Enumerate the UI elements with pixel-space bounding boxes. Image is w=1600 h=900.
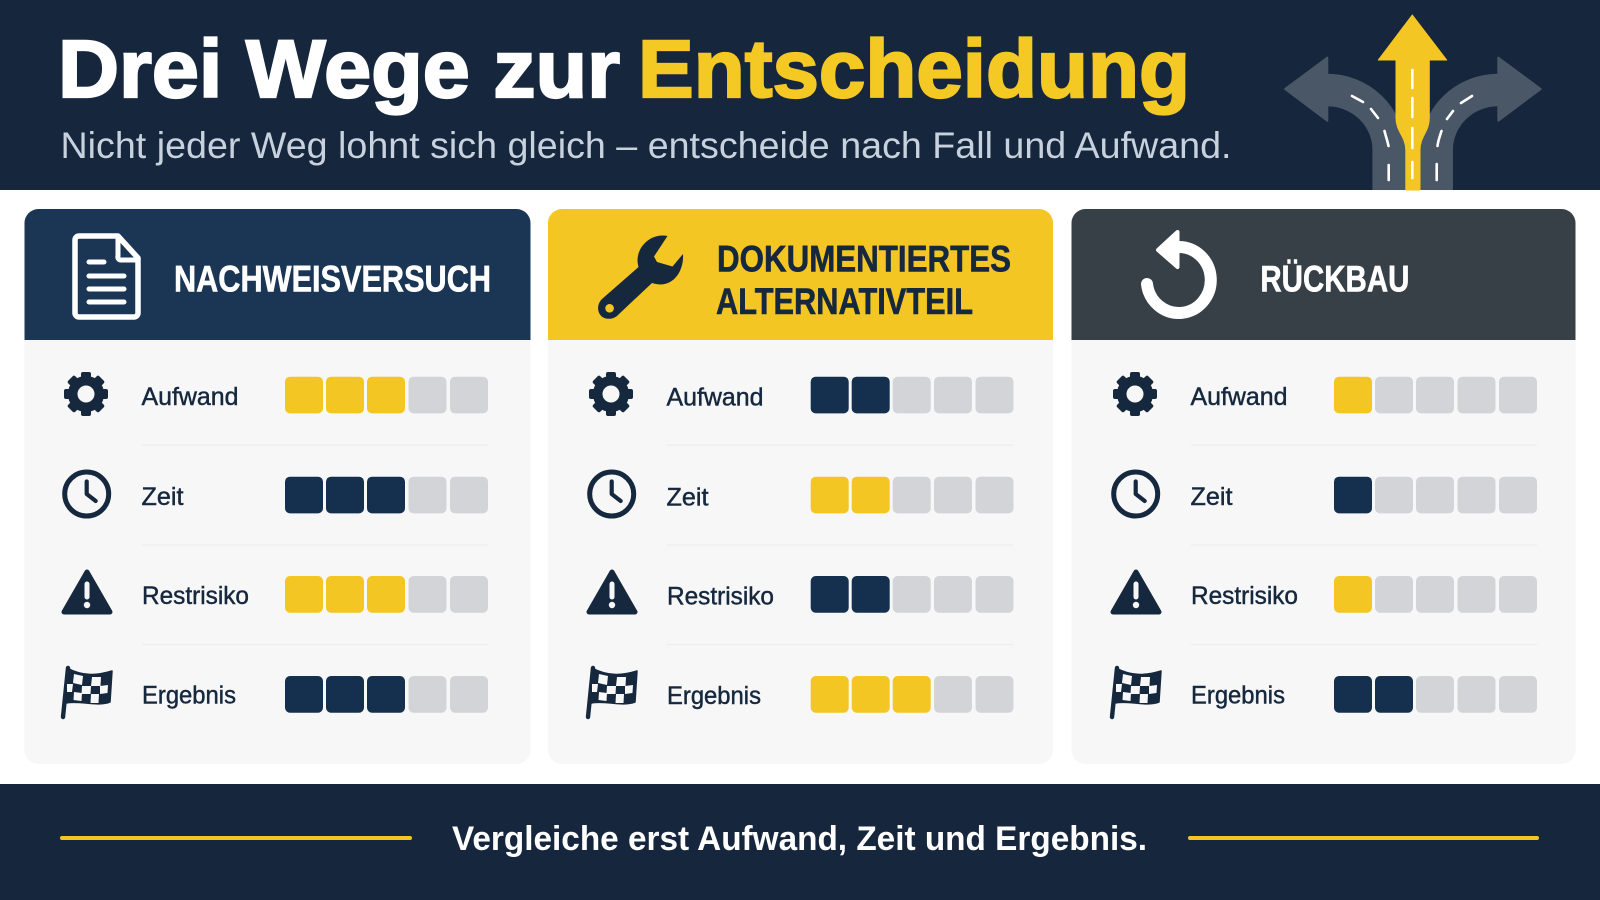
icon: gear [64,372,108,416]
rows [588,372,1014,717]
icon: undo arrow [1147,232,1211,313]
rating 2 of 5 [811,377,1014,413]
icon: checkered flag [1112,668,1161,717]
label: Restrisiko [1191,582,1298,610]
icon: warning [1113,572,1159,612]
panel: Nachweisversuch [24,209,530,764]
row: Aufwand [64,372,488,416]
icon: clock [65,472,109,516]
label: Ergebnis [142,681,236,709]
row: Ergebnis [63,668,488,717]
label: Aufwand [1190,383,1288,411]
title [58,24,1190,115]
panel header [24,209,530,340]
icon: checkered flag [63,668,112,717]
icon: gear [1113,372,1157,416]
rating 3 of 5 [285,377,488,413]
rows [1112,372,1537,717]
row: Zeit [590,472,1014,516]
panel header [1072,209,1576,340]
rating 1 of 5 [1334,576,1537,613]
icon: wrench [598,236,683,319]
label: Restrisiko [667,582,774,610]
label: Restrisiko [142,582,249,610]
icon: warning [64,572,110,612]
row: Restrisiko [589,572,1014,613]
label: Ergebnis [667,682,761,710]
rating 1 of 5 [1334,477,1537,513]
row: Aufwand [1113,372,1537,416]
row: Restrisiko [1113,572,1537,613]
rating 1 of 5 [1334,377,1537,413]
row: Restrisiko [64,572,488,613]
panel: Dokumentiertes Alternativteil [548,209,1053,764]
rows [63,372,488,717]
row: Ergebnis [588,668,1014,717]
icon: clock [1114,472,1158,516]
label: Ergebnis [1191,681,1285,709]
header band [0,0,1600,190]
icon: clock [590,472,634,516]
row: Aufwand [589,372,1014,416]
rating 3 of 5 [285,576,488,613]
icon: gear [589,372,633,416]
rating 3 of 5 [285,477,488,513]
rating 2 of 5 [811,477,1014,513]
title: Drei Wege zur [58,24,620,115]
label: Zeit [142,483,184,511]
row: Zeit [65,472,488,516]
icon: document [75,236,138,317]
row: Zeit [1114,472,1537,516]
heading: ALTERNATIVTEIL [716,281,973,322]
icon: warning [589,572,635,612]
rating 3 of 5 [811,676,1014,713]
rating 2 of 5 [1334,676,1537,713]
label: Aufwand [666,384,764,412]
heading: RÜCKBAU [1260,259,1409,300]
label: Zeit [1190,483,1233,511]
footer band [0,784,1600,900]
heading: NACHWEISVERSUCH [174,259,491,300]
icon: checkered flag [588,668,637,717]
icon: three-way road arrows [1285,15,1541,190]
label: Zeit [666,484,709,512]
panel header [548,209,1053,340]
rating 2 of 5 [811,576,1014,613]
rating 3 of 5 [285,676,488,713]
footer takeaway: Vergleiche erst Aufwand, Zeit und Ergebnis. [452,820,1147,858]
heading [716,239,1011,322]
label: Aufwand [142,383,238,411]
heading: DOKUMENTIERTES [717,239,1011,280]
panel: Rückbau [1072,209,1576,764]
row: Ergebnis [1112,668,1537,717]
title: Entscheidung [638,24,1190,115]
subtitle: Nicht jeder Weg lohnt sich gleich – entscheide nach Fall und Aufwand. [60,125,1232,166]
